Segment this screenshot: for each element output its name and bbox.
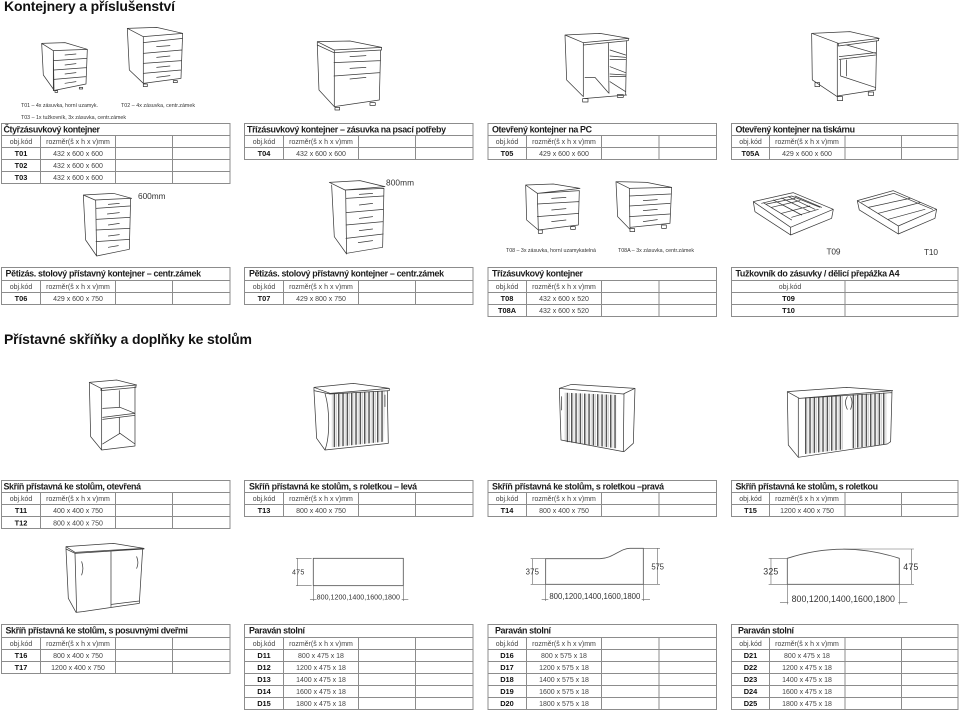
table: Skříň přístavná ke stolům, otevřená: rozměr(š x h x v)mm [46,496,110,503]
table: Paraván stolní D11–D15: D13 [257,675,271,684]
table: Skříň přístavná ke stolům, otevřená: 800 x 400 x 750 [53,520,103,528]
table: Čtyřzásuvkový kontejner: 432 x 600 x 600 [53,175,103,182]
table: Otevřený kontejner na tiskárnu [732,124,958,160]
caption: T02: T02 – 4x zásuvka, centr.zámek [121,103,195,109]
table: Skříň přístavná ke stolům, s roletkou – levá: obj.kód [253,496,275,503]
table: Paraván stolní D16–D20: 1800 x 575 x 18 [539,701,589,708]
table: Skříň přístavná ke stolům, s posuvnými dveřmi: T16 [15,651,27,660]
table: Paraván stolní D11–D15: rozměr(š x h x v)mm [289,641,353,648]
table: Skříň přístavná ke stolům, s posuvnými dveřmi [2,624,230,674]
icon: open cabinet T11 [89,380,137,450]
table: Paraván stolní D11–D15: D15 [257,699,271,708]
table: Skříň přístavná ke stolům, s posuvnými dveřmi: rozměr(š x h x v)mm [46,641,110,648]
table: Paraván stolní D16–D20: 1600 x 575 x 18 [539,689,589,696]
table: Paraván stolní D21–D25: obj.kód [739,641,762,648]
table: Otevřený kontejner na PC: 429 x 600 x 600 [539,151,589,158]
table: Pětizás. stolový přístavný kontejner T07 [244,268,473,304]
icon: shutter cabinet T14 [559,384,635,452]
table: Paraván stolní D16–D20: rozměr(š x h x v)mm [532,641,596,648]
table: Pětizás. stolový přístavný kontejner T07: T07 [258,294,270,303]
table: Paraván stolní D21–D25: 1400 x 475 x 18 [782,677,832,684]
icon: shutter cabinet T13 [314,383,389,450]
caption: T03: T03 – 1x tužkovník, 3x zásuvka, centr.zámek [21,115,126,121]
caption: T08: T08 – 3x zásuvka, horní uzamykatelná [506,248,596,254]
label: T09: T09 [826,246,841,256]
table: Skříň přístavná ke stolům, otevřená: T12 [15,518,27,528]
table: Paraván stolní D11–D15: 1600 x 475 x 18 [296,689,346,696]
table: Čtyřzásuvkový kontejner: Čtyřzásuvkový kontejner [4,124,101,134]
icon: container T01 [42,43,87,92]
table: Skříň přístavná ke stolům, s roletkou: T15 [744,506,757,515]
table: Skříň přístavná ke stolům, otevřená: T11 [15,506,27,515]
table: Otevřený kontejner na PC: Otevřený kontejner na PC [492,124,593,134]
table: Čtyřzásuvkový kontejner: T03 [15,173,27,182]
table: Skříň přístavná ke stolům, s roletkou –pravá [488,480,716,516]
table: Paraván stolní D11–D15: obj.kód [253,641,275,648]
table: Třízásuvkový kontejner – zásuvka na psací potřeby [244,124,473,160]
table: Skříň přístavná ke stolům, s roletkou: obj.kód [739,496,762,503]
table: Paraván stolní D11–D15: 1200 x 475 x 18 [296,665,346,672]
table: Paraván stolní D16–D20: D19 [500,687,514,696]
table: Paraván stolní D16–D20: D18 [500,675,514,684]
table: Pětizás. stolový přístavný kontejner T07: obj.kód [253,284,275,291]
icon: pencil tray T09 [753,193,833,235]
table: Paraván stolní D11–D15: D14 [257,687,272,696]
icon: container T08 [526,184,580,233]
table: Pětizás. stolový přístavný kontejner T06: rozměr(š x h x v)mm [46,284,110,291]
table: Paraván stolní D21–D25: 1600 x 475 x 18 [782,689,832,696]
table: Třízásuvkový kontejner: Třízásuvkový kontejner [492,268,584,278]
table: Tužkovník do zásuvky / dělicí přepážka A4: T10 [782,306,795,315]
table: Otevřený kontejner na tiskárnu: T05A [741,149,760,158]
label: T10: T10 [924,247,938,257]
table: Otevřený kontejner na tiskárnu: rozměr(š x h x v)mm [775,139,839,146]
table: Paraván stolní D11–D15: D12 [257,663,271,672]
table: Skříň přístavná ke stolům, otevřená: Skříň přístavná ke stolům, otevřená [4,482,141,492]
icon: open container T05A [812,32,879,101]
icon: container T04 [317,41,382,110]
table: Skříň přístavná ke stolům, otevřená: obj.kód [10,496,32,503]
table: Paraván stolní D16–D20: D20 [500,699,514,708]
table: Skříň přístavná ke stolům, s roletkou: 1200 x 400 x 750 [780,508,834,515]
table: Skříň přístavná ke stolům, s roletkou – levá [244,480,473,516]
diagram: asymmetric screen D16–D20: 800,1200,1400,1600,1800 [549,592,641,601]
table: Čtyřzásuvkový kontejner: obj.kód [10,139,32,146]
table: Paraván stolní D11–D15: 1400 x 475 x 18 [296,677,346,684]
table: Otevřený kontejner na tiskárnu: Otevřený kontejner na tiskárnu [736,124,855,134]
table: Paraván stolní D21–D25 [732,624,958,710]
table: Skříň přístavná ke stolům, s roletkou – levá: T13 [258,506,270,515]
table: Pětizás. stolový přístavný kontejner T06: 429 x 600 x 750 [53,296,103,303]
table: Paraván stolní D11–D15 [244,624,473,710]
table: Třízásuvkový kontejner – zásuvka na psací potřeby: rozměr(š x h x v)mm [289,139,353,146]
table: Paraván stolní D16–D20: 1200 x 575 x 18 [539,665,589,672]
table: Paraván stolní D11–D15: 1800 x 475 x 18 [296,701,346,708]
diagram: arched screen D21–D25: 325 [763,567,778,577]
table: Skříň přístavná ke stolům, s roletkou –pravá: rozměr(š x h x v)mm [532,496,596,503]
table: Čtyřzásuvkový kontejner [2,124,230,184]
table: Čtyřzásuvkový kontejner: rozměr(š x h x v)mm [46,139,110,146]
table: Pětizás. stolový přístavný kontejner T07: 429 x 800 x 750 [296,296,346,303]
table: Skříň přístavná ke stolům, otevřená [2,480,230,528]
table: Skříň přístavná ke stolům, s roletkou: rozměr(š x h x v)mm [775,496,839,503]
table: Tužkovník do zásuvky / dělicí přepážka A4 [732,268,958,316]
table: Tužkovník do zásuvky / dělicí přepážka A4: T09 [782,294,795,303]
table: Třízásuvkový kontejner – zásuvka na psací potřeby: Třízásuvkový kontejner – zásuvka na psací potřeby [247,124,446,134]
table: Třízásuvkový kontejner: T08 [501,294,513,303]
table: Skříň přístavná ke stolům, s roletkou – levá: rozměr(š x h x v)mm [289,496,353,503]
table: Tužkovník do zásuvky / dělicí přepážka A4: obj.kód [779,284,801,291]
table: Paraván stolní D11–D15: D11 [257,651,271,660]
table: Paraván stolní D21–D25: 800 x 475 x 18 [784,653,830,660]
table: Skříň přístavná ke stolům, s roletkou – levá: Skříň přístavná ke stolům, s roletkou – levá [249,482,417,492]
diagram: rectangular screen D11–D15: 475 [292,569,304,577]
table: Otevřený kontejner na tiskárnu: obj.kód [739,139,762,146]
label: 800mm: 800mm [386,178,414,188]
table: Otevřený kontejner na PC: rozměr(š x h x v)mm [532,139,596,146]
table: Čtyřzásuvkový kontejner: 432 x 600 x 600 [53,163,103,170]
diagram: arched screen D21–D25 [763,549,918,604]
table: Skříň přístavná ke stolům, s roletkou – levá: 800 x 400 x 750 [296,508,346,515]
table: Třízásuvkový kontejner: 432 x 600 x 520 [539,308,589,315]
table: Skříň přístavná ke stolům, s posuvnými dveřmi: 800 x 400 x 750 [53,653,103,660]
table: Pětizás. stolový přístavný kontejner T06 [2,268,230,304]
table: Paraván stolní D21–D25: D21 [744,651,757,660]
table: Skříň přístavná ke stolům, s roletkou: Skříň přístavná ke stolům, s roletkou [736,482,878,492]
table: Paraván stolní D21–D25: rozměr(š x h x v)mm [775,641,839,648]
icon: container T06 [83,193,132,256]
table: Skříň přístavná ke stolům, s posuvnými dveřmi: T17 [15,663,27,672]
diagram: arched screen D21–D25: 475 [903,562,918,572]
table: Třízásuvkový kontejner – zásuvka na psací potřeby: obj.kód [253,139,275,146]
icon: container T08A [616,182,672,232]
table: Třízásuvkový kontejner: T08A [498,306,517,315]
table: Skříň přístavná ke stolům, s roletkou –pravá: Skříň přístavná ke stolům, s roletkou –pravá [492,482,664,492]
table: Skříň přístavná ke stolům, s roletkou –pravá: 800 x 400 x 750 [539,508,589,515]
table: Třízásuvkový kontejner: rozměr(š x h x v)mm [532,284,596,291]
table: Paraván stolní D21–D25: D25 [744,699,757,708]
table: Paraván stolní D16–D20: D17 [500,663,514,672]
table: Pětizás. stolový přístavný kontejner T06: T06 [15,294,27,303]
diagram: asymmetric screen D16–D20: 575 [651,562,664,571]
table: Paraván stolní D16–D20: obj.kód [496,641,518,648]
table: Čtyřzásuvkový kontejner: 432 x 600 x 600 [53,151,103,158]
heading: Přístavné skříňky a doplňky ke stolům: Přístavné skříňky a doplňky ke stolům [4,331,252,347]
table: Třízásuvkový kontejner: obj.kód [496,284,518,291]
table: Skříň přístavná ke stolům, s roletkou –pravá: T14 [501,506,514,515]
diagram: rectangular screen D11–D15 [292,558,408,601]
table: Skříň přístavná ke stolům, s roletkou [732,480,958,516]
table: Paraván stolní D16–D20: D16 [500,651,514,660]
table: Pětizás. stolový přístavný kontejner T07: rozměr(š x h x v)mm [289,284,353,291]
table: Paraván stolní D21–D25: 1200 x 475 x 18 [782,665,832,672]
icon: container T07 [329,181,385,254]
table: Skříň přístavná ke stolům, s posuvnými dveřmi: obj.kód [10,641,32,648]
table: Pětizás. stolový přístavný kontejner T06: obj.kód [10,284,32,291]
table: Třízásuvkový kontejner: 432 x 600 x 520 [539,296,589,303]
caption: T08A: T08A – 3x zásuvka, centr.zámek [618,248,694,254]
table: Paraván stolní D11–D15: Paraván stolní [249,626,306,636]
table: Skříň přístavná ke stolům, s posuvnými dveřmi: Skříň přístavná ke stolům, s posuvnými dveřmi [6,626,188,636]
table: Paraván stolní D21–D25: D23 [744,675,757,684]
table: Tužkovník do zásuvky / dělicí přepážka A4: Tužkovník do zásuvky / dělicí přepážka A4 [736,268,900,278]
table: Pětizás. stolový přístavný kontejner T06: Pětizás. stolový přístavný kontejner – centr.zámek [6,268,201,278]
table: Třízásuvkový kontejner – zásuvka na psací potřeby: T04 [258,149,271,158]
table: Pětizás. stolový přístavný kontejner T07: Pětizás. stolový přístavný kontejner – centr.zámek [249,268,444,278]
table: Paraván stolní D16–D20 [488,624,716,710]
table: Skříň přístavná ke stolům, s posuvnými dveřmi: 1200 x 400 x 750 [51,665,105,672]
icon: divider tray T10 [857,191,937,234]
label: 600mm: 600mm [138,191,166,201]
table: Čtyřzásuvkový kontejner: T02 [15,161,27,170]
diagram: asymmetric screen D16–D20 [526,548,664,601]
table: Čtyřzásuvkový kontejner: T01 [15,149,27,158]
table: Třízásuvkový kontejner [488,268,716,316]
table: Paraván stolní D16–D20: 1400 x 575 x 18 [539,677,589,684]
diagram: rectangular screen D11–D15: 800,1200,1400,1600,1800 [317,593,400,601]
table: Otevřený kontejner na PC [488,124,716,160]
diagram: arched screen D21–D25: 800,1200,1400,1600,1800 [792,594,895,604]
icon: sliding door cabinet T16 [66,543,144,612]
table: Paraván stolní D16–D20: Paraván stolní [495,626,552,636]
table: Otevřený kontejner na PC: T05 [501,149,513,158]
icon: open container T05 [565,33,629,102]
table: Otevřený kontejner na tiskárnu: 429 x 600 x 600 [782,151,832,158]
table: Paraván stolní D21–D25: Paraván stolní [738,626,795,636]
icon: container T02 [127,27,183,87]
icon: double shutter cabinet T15 [787,387,893,457]
table: Třízásuvkový kontejner – zásuvka na psací potřeby: 432 x 600 x 600 [296,151,346,158]
table: Paraván stolní D11–D15: 800 x 475 x 18 [298,653,344,660]
table: Paraván stolní D21–D25: D24 [744,687,758,696]
diagram: asymmetric screen D16–D20: 375 [526,567,539,576]
table: Otevřený kontejner na PC: obj.kód [496,139,518,146]
table: Paraván stolní D21–D25: D22 [744,663,757,672]
table: Skříň přístavná ke stolům, s roletkou –pravá: obj.kód [496,496,518,503]
table: Paraván stolní D21–D25: 1800 x 475 x 18 [782,701,832,708]
caption: T01: T01 – 4x zásuvka, horní uzamyk. [21,103,98,109]
table: Skříň přístavná ke stolům, otevřená: 400 x 400 x 750 [53,508,103,515]
table: Paraván stolní D16–D20: 800 x 575 x 18 [541,653,587,660]
